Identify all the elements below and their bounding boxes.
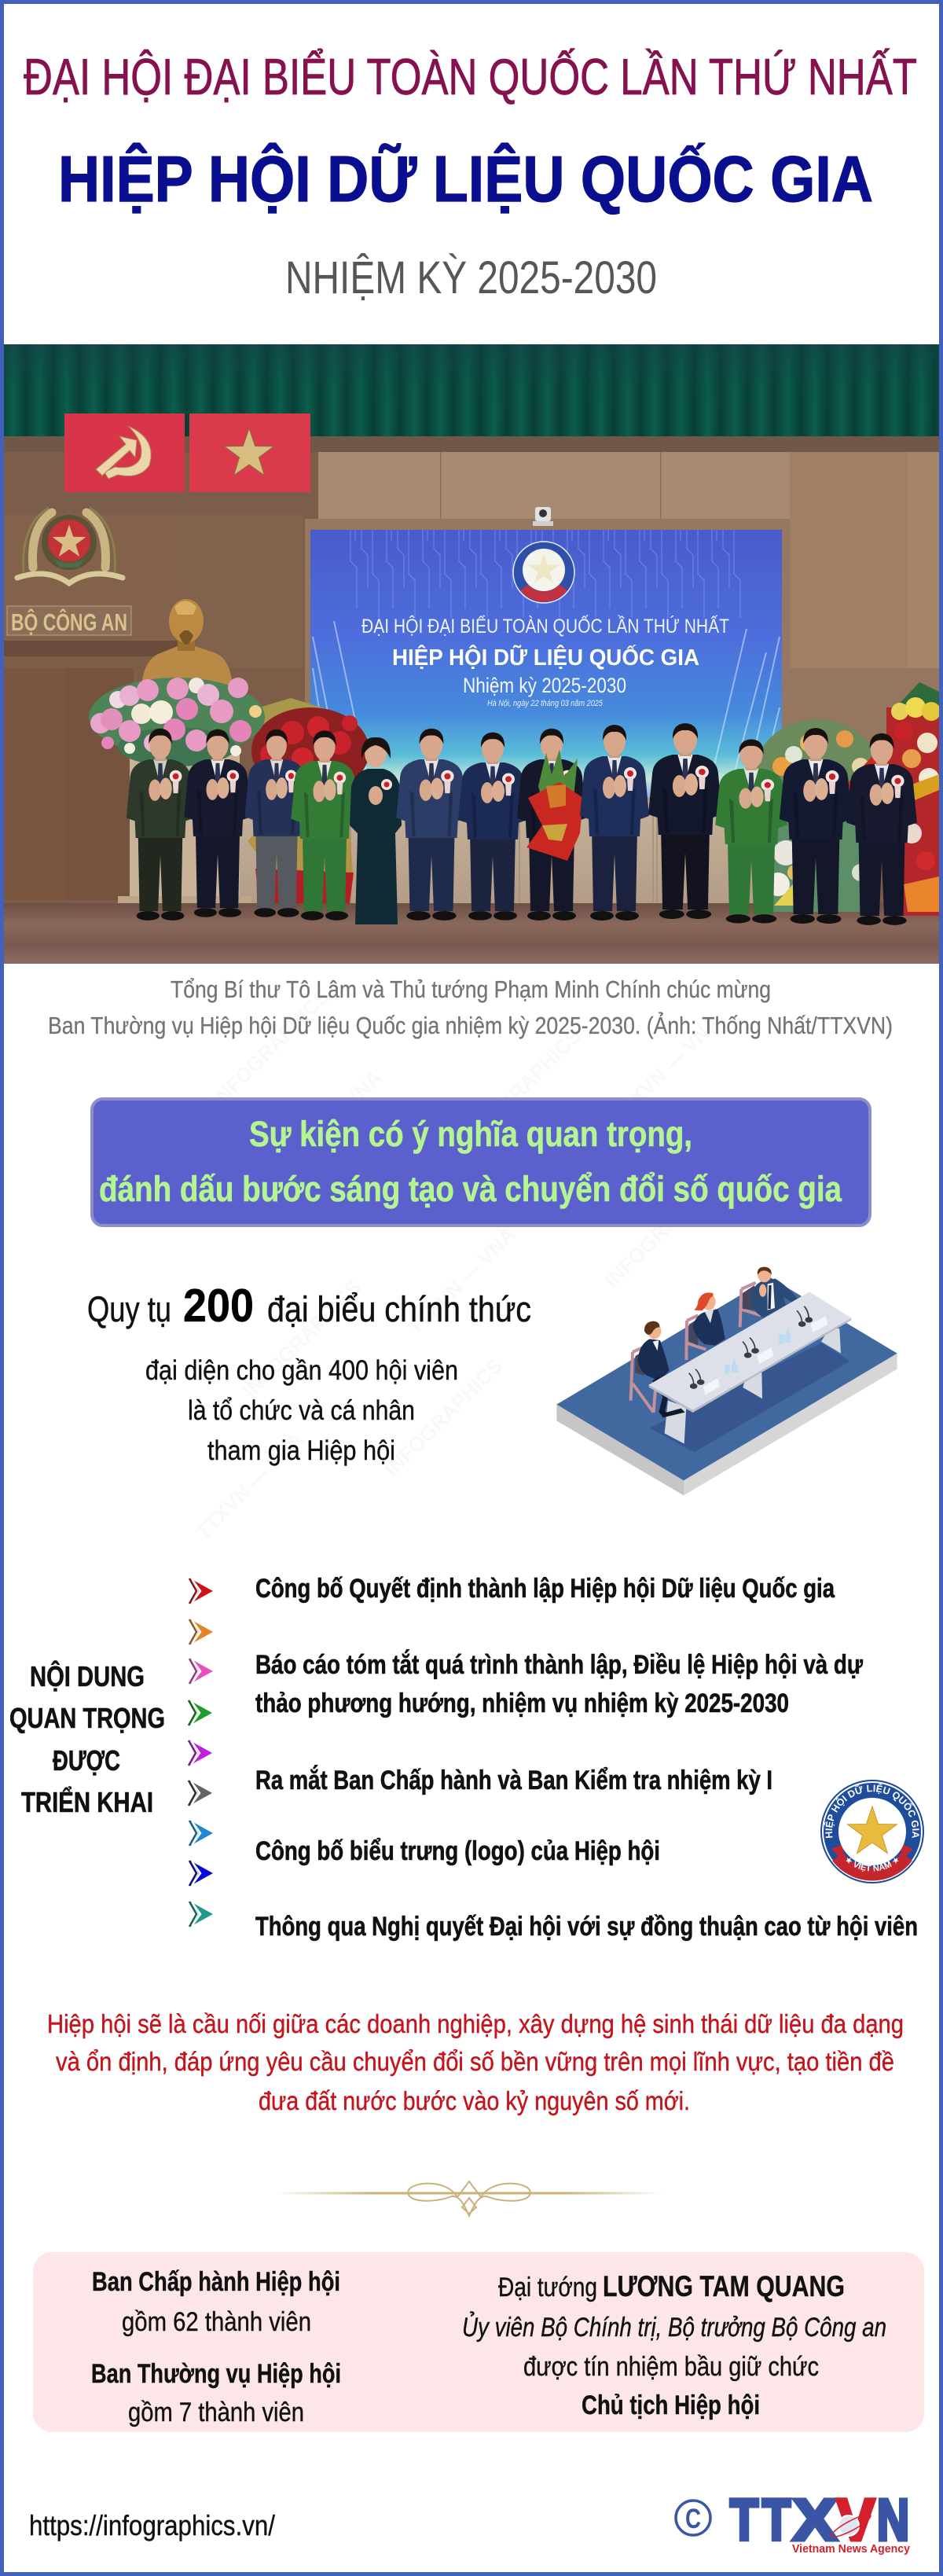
ttxvn logo xyxy=(676,2487,911,2556)
delegate 6 xyxy=(396,729,467,921)
wordmark: T xyxy=(762,2487,791,2552)
delegate 7 xyxy=(458,733,527,921)
statistic heading: 200 xyxy=(183,1280,254,1332)
chairman xyxy=(462,2270,886,2420)
beige wall below screen xyxy=(118,755,790,903)
agenda heading: QUAN TRỌNG xyxy=(9,1702,165,1734)
arrow gray xyxy=(189,1780,212,1806)
item 2: thảo phương hướng, nhiệm vụ nhiệm kỳ 2025-2030 xyxy=(255,1689,789,1718)
wordmark xyxy=(730,2487,909,2552)
statistic heading: đại biểu chính thức xyxy=(267,1289,531,1329)
faint watermarks: INFOGRAPHICS xyxy=(380,1354,507,1481)
panel background xyxy=(33,2252,924,2432)
delegate 10 xyxy=(648,723,722,919)
banner line 2: đánh dấu bước sáng tạo và chuyển đổi số quốc gia xyxy=(99,1169,842,1209)
faint watermarks: INFOGRAPHICS xyxy=(458,1023,585,1151)
statistic detail xyxy=(145,1355,458,1466)
wordmark: T xyxy=(730,2487,758,2552)
name cards xyxy=(703,1316,827,1395)
statistic heading xyxy=(87,1280,531,1332)
water bottles xyxy=(725,1326,791,1373)
illustration: isometric panel table xyxy=(556,1267,897,1495)
arrow purple xyxy=(189,1740,212,1766)
delegate 5: ao dai xyxy=(350,737,402,924)
arrow column xyxy=(189,1578,213,1927)
wordmark: X xyxy=(793,2487,837,2552)
banner box xyxy=(92,1099,870,1226)
item 4: Công bố biểu trưng (logo) của Hiệp hội xyxy=(255,1836,660,1866)
stage floor xyxy=(4,903,939,964)
screen date: Hà Nội, ngày 22 tháng 03 năm 2025 xyxy=(487,699,604,708)
faint watermarks: TTXVN — VNA xyxy=(191,1427,308,1544)
title line 3: NHIỆM KỲ 2025-2030 xyxy=(285,252,657,303)
section: key agenda xyxy=(9,1574,924,1942)
arrow green xyxy=(189,1700,212,1725)
red summary paragraph: đưa đất nước bước vào kỷ nguyên số mới. xyxy=(259,2086,690,2115)
agency name: Vietnam News Agency xyxy=(792,2542,911,2556)
item 3: Ra mắt Ban Chấp hành và Ban Kiểm tra nhiệm kỳ I xyxy=(255,1766,772,1795)
association logo: HIỆP HỘI DỮ LIỆU QUỐC GIA xyxy=(824,1783,919,1838)
lotus arrangement xyxy=(89,678,265,766)
agenda heading: TRIỂN KHAI xyxy=(21,1785,153,1818)
ho chi minh bust xyxy=(141,599,233,693)
party flag panel xyxy=(64,413,185,492)
flowers right xyxy=(754,682,941,916)
copyright mark xyxy=(676,2501,710,2535)
faint watermarks xyxy=(191,984,727,1544)
executive board xyxy=(92,2267,340,2337)
arrow red xyxy=(189,1578,213,1604)
globe xyxy=(829,2512,873,2540)
banner line 1: Sự kiện có ý nghĩa quan trọng, xyxy=(249,1114,692,1154)
association logo xyxy=(820,1780,924,1883)
person 1 and chair xyxy=(631,1321,670,1417)
delegate 13 xyxy=(846,733,917,925)
wood wall xyxy=(4,436,939,903)
wordmark: V xyxy=(837,2487,875,2552)
banner: event significance xyxy=(92,1099,870,1226)
delegate 8: with bouquet xyxy=(517,729,586,921)
delegate 3 xyxy=(245,729,308,917)
standing board: gồm 7 thành viên xyxy=(128,2398,304,2427)
wall lettering xyxy=(7,606,131,636)
association logo: ★ VIỆT NAM ★ xyxy=(846,1858,899,1872)
delegates row xyxy=(127,723,917,925)
ptz camera xyxy=(533,507,553,526)
delegates statistic xyxy=(87,1280,531,1466)
screen title lines: ĐẠI HỘI ĐẠI BIỂU TOÀN QUỐC LẦN THỨ NHẤT xyxy=(361,614,729,638)
statistic detail: tham gia Hiệp hội xyxy=(207,1435,395,1466)
arrow pink xyxy=(189,1659,213,1684)
public security emblem xyxy=(17,508,123,583)
delegate 12 xyxy=(780,728,852,924)
delegate 4: police uniform xyxy=(291,730,358,921)
executive board: Ban Chấp hành Hiệp hội xyxy=(92,2267,340,2297)
screen term: Nhiệm kỳ 2025-2030 xyxy=(463,674,626,697)
red summary paragraph xyxy=(47,2009,904,2115)
star flag panel xyxy=(189,413,310,492)
red flowers left xyxy=(248,698,369,903)
curtain xyxy=(4,344,939,436)
caption line 1: Tổng Bí thư Tô Lâm và Thủ tướng Phạm Minh Chính chúc mừng xyxy=(171,976,771,1003)
executive board: gồm 62 thành viên xyxy=(122,2307,311,2337)
item 2 xyxy=(255,1650,863,1718)
faint watermarks: TTXVN — VNA xyxy=(270,1065,387,1182)
source url: https://infographics.vn/ xyxy=(29,2509,275,2541)
stage screen xyxy=(310,530,782,797)
agenda heading xyxy=(9,1659,165,1818)
photo caption xyxy=(48,976,893,1039)
arrow blue xyxy=(189,1821,213,1846)
delegate 11: police uniform xyxy=(715,739,787,923)
faint watermarks: INFOGRAPHICS xyxy=(207,984,334,1112)
person 2 and chair xyxy=(686,1292,725,1360)
screen logo xyxy=(513,542,574,603)
table xyxy=(649,1292,851,1444)
arrow orange xyxy=(189,1619,213,1644)
statistic detail: đại diện cho gần 400 hội viên xyxy=(145,1355,458,1386)
chairman: Chủ tịch Hiệp hội xyxy=(582,2390,760,2420)
standing board xyxy=(91,2359,341,2427)
chairman: được tín nhiệm bầu giữ chức xyxy=(523,2352,819,2382)
wall lettering: BỘ CÔNG AN xyxy=(11,608,127,636)
ornament divider xyxy=(275,2181,663,2216)
agenda heading: NỘI DUNG xyxy=(30,1659,145,1692)
delegate 1: army uniform xyxy=(127,729,194,921)
agenda items xyxy=(255,1574,918,1942)
faint watermarks: TTXVN — VNA xyxy=(403,1222,520,1339)
delegate 9 xyxy=(580,725,649,921)
arrow teal xyxy=(189,1902,213,1927)
screen light rays xyxy=(310,621,780,786)
panel: leadership xyxy=(33,2252,924,2432)
arrow navy xyxy=(189,1861,213,1886)
agenda heading: ĐƯỢC xyxy=(53,1744,120,1777)
copyright mark: C xyxy=(685,2504,701,2534)
faint watermarks: TTXVN — VNA xyxy=(607,1010,725,1127)
platform xyxy=(556,1277,897,1495)
microphones xyxy=(689,1306,812,1388)
screen association name: HIỆP HỘI DỮ LIỆU QUỐC GIA xyxy=(392,644,699,671)
delegate 2 xyxy=(184,729,251,917)
wordmark: N xyxy=(877,2487,909,2552)
bouquet xyxy=(527,749,583,861)
faint watermarks: INFOGRAPHICS xyxy=(600,1165,727,1292)
chairman: Đại tướng xyxy=(498,2273,597,2302)
person 3 and chair xyxy=(740,1267,811,1327)
title block xyxy=(24,48,917,303)
statistic heading: Quy tụ xyxy=(87,1289,171,1329)
standing board: Ban Thường vụ Hiệp hội xyxy=(91,2359,341,2389)
faint watermarks: INFOGRAPHICS xyxy=(238,1275,365,1402)
chairman: LƯƠNG TAM QUANG xyxy=(603,2270,845,2302)
photo: congress group portrait xyxy=(4,344,941,964)
statistic detail: là tổ chức và cá nhân xyxy=(188,1395,415,1426)
